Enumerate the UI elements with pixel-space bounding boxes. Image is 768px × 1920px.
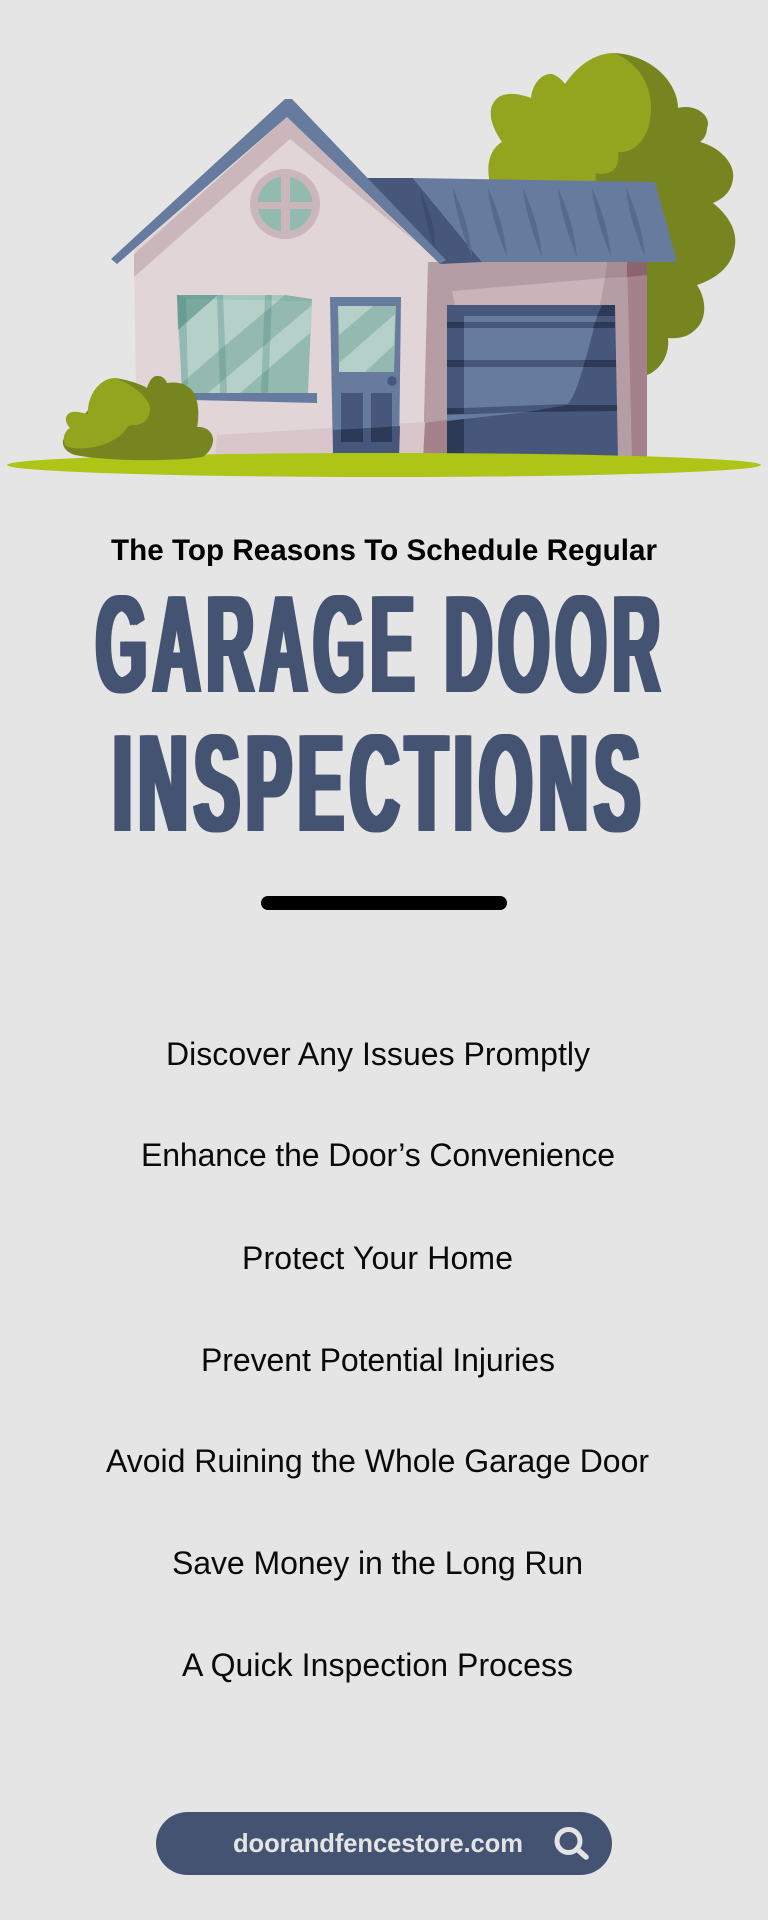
reasons list: Avoid Ruining the Whole Garage Door — [106, 1443, 649, 1479]
icon: tree — [488, 53, 735, 375]
title — [96, 567, 666, 861]
illustration: house with trees — [7, 53, 761, 477]
reasons list — [106, 1036, 649, 1683]
icon: gable shadow — [134, 117, 418, 277]
icon: garage door — [447, 305, 618, 458]
reasons list: Enhance the Door’s Convenience — [141, 1137, 615, 1173]
divider bar — [261, 896, 507, 910]
icon: bush — [63, 376, 213, 460]
icon: front door — [330, 297, 401, 458]
icon: gable roof trim — [111, 99, 446, 264]
reasons list: Discover Any Issues Promptly — [166, 1036, 590, 1072]
reasons list: Protect Your Home — [242, 1240, 513, 1276]
website url: doorandfencestore.com — [233, 1830, 523, 1858]
website pill — [156, 1812, 612, 1875]
icon: round attic window — [250, 169, 320, 239]
title: INSPECTIONS — [113, 706, 647, 861]
title: GARAGE DOOR — [96, 567, 666, 722]
reasons list: A Quick Inspection Process — [182, 1647, 573, 1683]
icon: garage wall — [423, 258, 647, 458]
icon: main house wall — [134, 117, 442, 458]
icon: magnifier — [557, 1830, 586, 1857]
icon: wall shadow — [215, 422, 425, 458]
icon: back roof — [367, 178, 677, 264]
reasons list: Save Money in the Long Run — [172, 1545, 583, 1581]
icon: ground — [7, 453, 761, 477]
icon: front window — [177, 295, 317, 403]
subtitle: The Top Reasons To Schedule Regular — [111, 534, 657, 567]
reasons list: Prevent Potential Injuries — [201, 1342, 555, 1378]
